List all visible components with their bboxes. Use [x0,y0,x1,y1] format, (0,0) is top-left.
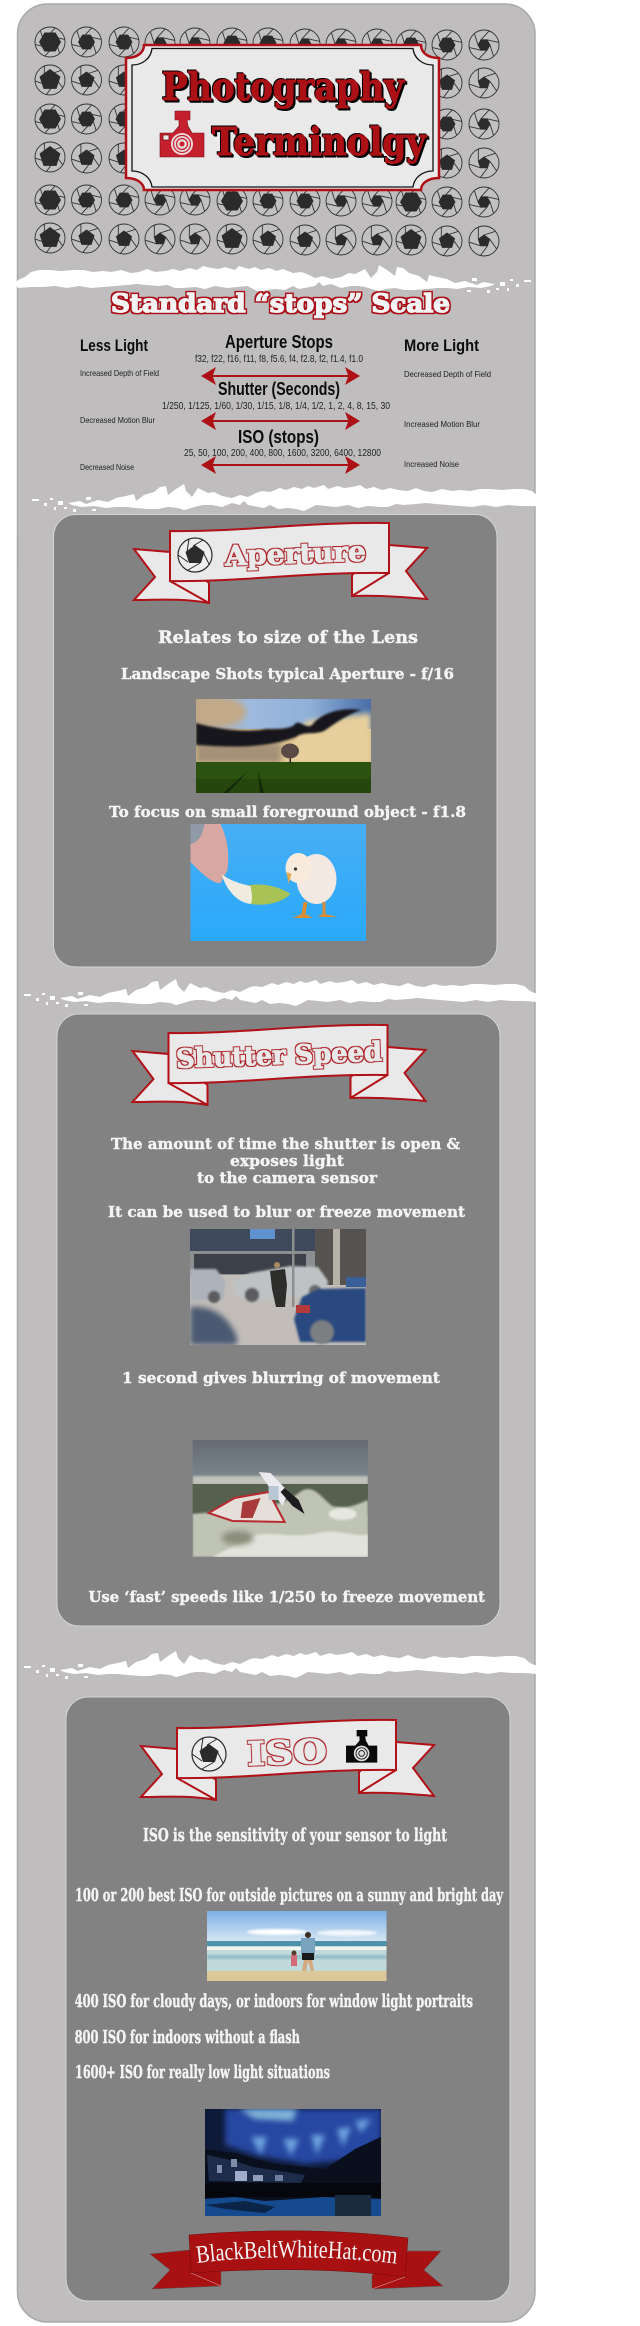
text: small foreground object: To focus on small foreground object - f1.8 [109,804,466,821]
scale: less light column [80,336,159,472]
banner: shutter speed [132,1025,426,1105]
text: blur or freeze: It can be used to blur or freeze movement [108,1204,465,1221]
photo: windsurfer [192,1440,368,1557]
scale: iso stops: 25, 50, 100, 200, 400, 800, 1600, 3200, 6400, 12800 [184,447,381,459]
scale: more light column [404,336,491,469]
scale: less light column: Less Light [80,336,148,355]
scale: more light column: Decreased Depth of Field [404,369,491,379]
scale: more light column: Increased Motion Blur [404,419,480,429]
text: amount of time [111,1136,460,1187]
scale: aperture stops: Aperture Stops [225,332,333,352]
photo: street with blurred cars [190,1229,366,1345]
banner: iso [141,1720,434,1800]
text: 1600 iso: 1600+ ISO for really low light situations [75,2062,330,2083]
banner: shutter speed: Shutter Speed [176,1037,382,1075]
panel: shutter speed [57,1014,500,1626]
banner: aperture [134,523,427,603]
scale: more light column: More Light [404,336,479,355]
text: iso is the sensitivity: ISO is the sensitivity of your sensor to light [143,1825,447,1846]
panel: iso [66,1696,510,2302]
text: amount of time: The amount of time the shutter is open & [111,1136,460,1153]
scale: less light column: Decreased Motion Blur [80,415,155,425]
scale: less light column: Increased Depth of Field [80,368,159,378]
text: 800 iso: 800 ISO for indoors without a flash [75,2027,300,2048]
banner: aperture: Aperture [223,537,366,572]
photo: chick and hand [190,824,366,941]
arrow: aperture [201,367,360,385]
torn strip 4 [24,1651,540,1679]
scale: iso stops [184,427,381,474]
ribbon: blackbeltwhitehat [150,2230,443,2290]
aperture icon pattern [35,27,499,256]
scale: less light column: Decreased Noise [80,462,134,472]
scale: shutter seconds: 1/250, 1/125, 1/60, 1/30, 1/15, 1/8, 1/4, 1/2, 1, 2, 4, 8, 15, 30 [162,400,390,412]
scale: aperture stops: f32, f22, f16, f11, f8, f5.6, f4, f2.8, f2, f1.4, f1.0 [195,353,363,365]
icon: red camera [160,111,204,157]
title card [126,45,439,190]
title line: Photography: Photography [162,64,405,109]
scale: shutter seconds: Shutter (Seconds) [218,379,340,399]
text: amount of time: exposes light [230,1153,344,1170]
arrow: iso [201,456,360,474]
panel: aperture [54,514,497,967]
photo: beach [207,1911,386,1981]
scale: iso stops: ISO (stops) [238,427,319,447]
torn strip 2 [32,484,548,512]
text: landscape shots: Landscape Shots typical Aperture - f/16 [121,666,454,683]
ribbon text: BlackBeltWhiteHat.com [196,2240,396,2264]
icon: black camera [346,1730,377,1763]
scale: more light column: Increased Noise [404,459,459,469]
text: use fast speeds: Use ‘fast’ speeds like 1/250 to freeze movement [88,1589,485,1606]
scale: shutter seconds [162,379,390,430]
text: one second: 1 second gives blurring of movement [122,1370,440,1387]
text: amount of time: to the camera sensor [197,1170,377,1187]
title line: Terminolgy: Terminolgy [212,119,427,164]
arrow: shutter [201,412,360,430]
torn strip 1 [15,265,531,293]
photo: aurora over village [205,2109,381,2216]
banner: iso: ISO [246,1732,328,1773]
heading: standard stops scale: Standard “stops” Scale [111,289,450,318]
text: relates to size of the lens: Relates to size of the Lens [158,628,418,647]
torn strip 3 [24,979,540,1007]
photo: landscape with tree [196,699,371,793]
scale: aperture stops [195,332,363,385]
